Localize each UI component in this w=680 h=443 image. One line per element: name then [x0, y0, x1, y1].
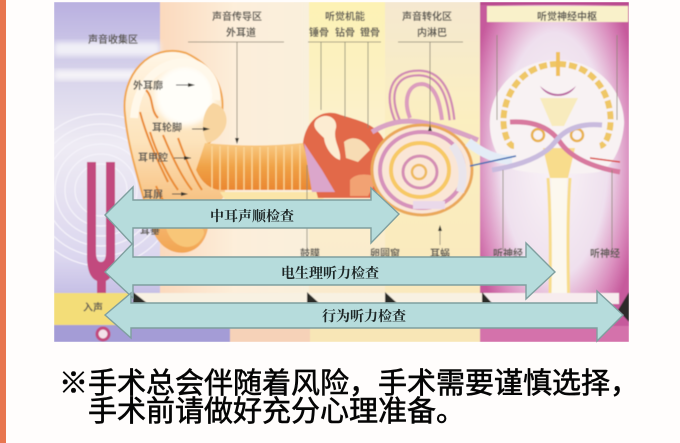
anatomy labels	[83, 10, 620, 314]
anatomy labels: 耳蜗	[430, 247, 450, 260]
anatomy labels: 听觉机能	[325, 10, 365, 23]
arrow: electrophysiological test: 电生理听力检查	[281, 265, 379, 282]
middle ear	[303, 113, 388, 198]
centre title band	[487, 6, 628, 22]
arrow: electrophysiological test	[105, 243, 555, 299]
arrow: behavioural test	[105, 291, 623, 341]
sound input band	[54, 293, 130, 325]
leader lines	[172, 35, 617, 252]
anatomy labels: 听神经	[493, 247, 523, 260]
anatomy labels: 声音转化区	[402, 10, 452, 23]
brain stem	[546, 177, 572, 294]
arrow: middle ear test	[105, 187, 399, 245]
auditory nerves	[468, 122, 620, 172]
anatomy labels: 外耳道	[226, 26, 256, 39]
arrow: middle ear test: 中耳声顺检查	[210, 208, 294, 225]
left accent strip	[0, 0, 6, 443]
inner ear: semicircular canals	[372, 73, 478, 140]
tuning fork	[86, 162, 116, 294]
outer ear	[124, 51, 227, 253]
anatomy labels: 声音收集区	[88, 33, 138, 46]
bottom cream strip with markers	[54, 292, 629, 342]
arrow: behavioural test: 行为听力检查	[322, 308, 406, 325]
anatomy labels: 入声	[83, 301, 103, 314]
anatomy labels: 声音传导区	[212, 10, 262, 23]
note text	[59, 367, 639, 428]
anatomy labels: 听神经	[590, 247, 620, 260]
auditory centre: brain	[490, 52, 624, 178]
anatomy labels: 卵圆窗	[370, 247, 400, 260]
inner ear: cochlea	[371, 124, 473, 216]
anatomical ear illustration	[25, 2, 629, 342]
anatomy labels: 耳轮脚	[152, 121, 182, 134]
fork base ring	[97, 328, 109, 340]
ear canal	[196, 143, 330, 200]
anatomy labels: 外耳廓	[133, 79, 163, 92]
note text: ※手术总会伴随着风险，手术需要谨慎选择，	[59, 367, 639, 400]
background zones	[54, 2, 629, 342]
anatomy labels: 镫骨	[360, 26, 380, 39]
anatomy labels: 鼓膜	[300, 247, 320, 260]
anatomy labels: 内淋巴	[417, 26, 447, 39]
sound ripples	[54, 114, 158, 266]
anatomy labels: 钻骨	[335, 26, 355, 39]
anatomy labels: 耳垂	[140, 225, 160, 237]
anatomy labels: 锤骨	[309, 26, 329, 39]
note text: 手术前请做好充分心理准备。	[88, 395, 465, 428]
anatomy labels: 耳甲腔	[138, 151, 168, 164]
anatomy labels: 听觉神经中枢	[537, 10, 597, 23]
anatomy labels: 耳屏	[143, 189, 163, 201]
